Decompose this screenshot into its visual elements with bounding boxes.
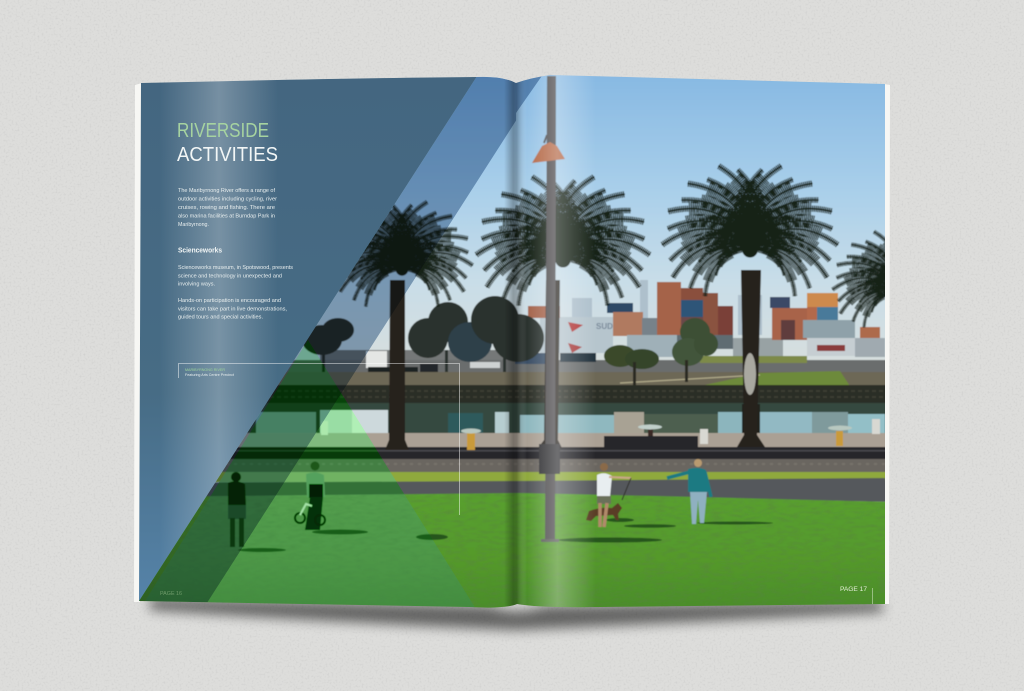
intro text: also marina facilities at Burndap Park in [178, 214, 275, 220]
person: woman walking dog [586, 463, 631, 527]
street lamp [532, 76, 565, 542]
foot path [130, 478, 890, 502]
background tree line on the left page [303, 296, 544, 372]
far bank ground [278, 370, 885, 386]
small trees [604, 318, 718, 386]
Scienceworks body text: guided tours and special activities. [178, 314, 263, 320]
lawn [130, 493, 890, 615]
overlay: green triangle [140, 340, 476, 609]
palm tree trunks [385, 270, 765, 450]
shipping containers [528, 282, 885, 357]
intro text [178, 188, 277, 228]
intro text: The Maribyrnong River offers a range of [178, 188, 276, 194]
overlay: translucent blue band, left page [139, 70, 519, 606]
title: RIVERSIDE [177, 120, 269, 142]
lawn shadows [238, 518, 773, 552]
person: woman on left [228, 472, 246, 547]
intro text: Maribyrnong. [178, 222, 209, 228]
sky [294, 75, 885, 360]
caption: Featuring Arts Centre Precinct [185, 373, 234, 377]
title: ACTIVITIES [177, 144, 278, 166]
magazine drop shadow [150, 598, 884, 630]
promenade furniture [321, 419, 880, 450]
gravel strip [130, 459, 900, 473]
railway track [130, 447, 900, 460]
page number 17 [840, 586, 872, 604]
section heading: Scienceworks: Scienceworks [178, 246, 222, 254]
rocky river bank [266, 384, 885, 404]
dog [586, 503, 622, 521]
road and parked vehicles [286, 349, 885, 373]
caption rule lines [178, 364, 460, 515]
intro text: outdoor activities including cycling, river [178, 196, 277, 202]
spine shading and fold highlight [504, 70, 596, 615]
page number 16: PAGE 16 [160, 591, 182, 597]
SUD container lettering: SUD [596, 322, 613, 331]
Scienceworks body text: Hands-on participation is encouraged and [178, 298, 281, 304]
Scienceworks body text: science and technology in unexpected and [178, 274, 282, 280]
trunk plaque [744, 353, 756, 395]
Scienceworks body text: Scienceworks museum, in Spotswood, presents [178, 265, 293, 271]
person: man with walker [295, 462, 325, 530]
white page edges [134, 83, 890, 604]
caption: MARIBYRNONG RIVER [185, 368, 225, 372]
promenade [238, 432, 885, 448]
Scienceworks body text: involving ways. [178, 282, 215, 288]
panel gloss [170, 80, 268, 550]
Scienceworks body text: visitors can take part in live demonstrations, [178, 306, 288, 312]
magazine spread [139, 75, 885, 608]
yellow-green verge [130, 472, 900, 482]
panel: dark blue diagonal [130, 70, 490, 610]
full-bleed riverside photograph [139, 75, 885, 608]
Scienceworks body text [178, 265, 293, 320]
caption [185, 368, 234, 377]
person: woman in teal top [667, 459, 711, 524]
page number 17: PAGE 17 [840, 586, 868, 593]
overlay: translucent blue band, right page [516, 76, 542, 113]
intro text: cruises, rowing and fishing. There are [178, 205, 275, 211]
palm trees [338, 163, 885, 328]
distant towers [572, 280, 762, 335]
river water [247, 402, 885, 434]
title [177, 120, 278, 166]
lawn texture [411, 494, 885, 587]
